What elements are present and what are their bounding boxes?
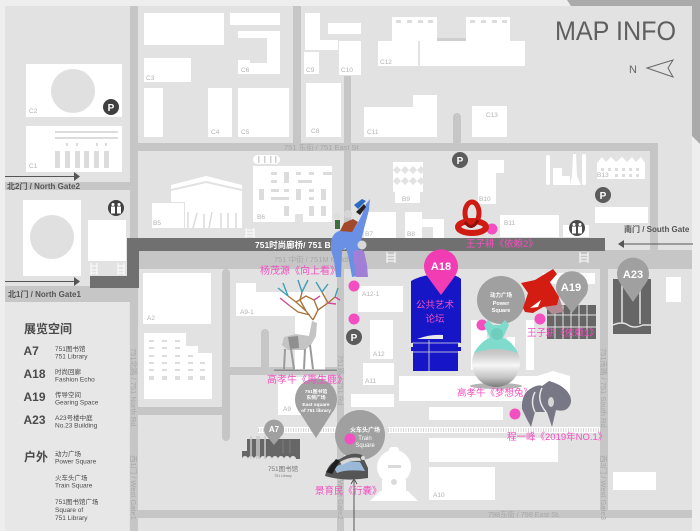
- railway: [258, 427, 600, 433]
- legend heading: outdoor: 户外: [24, 449, 48, 464]
- A19 marker: [556, 271, 588, 313]
- road and building labels: C13: [486, 112, 498, 119]
- road and building labels: A9-1: [240, 309, 254, 316]
- north compass: [629, 60, 673, 77]
- road and building labels: C1: [29, 163, 38, 170]
- building C9 and C10: [304, 13, 361, 75]
- street names: [129, 142, 609, 520]
- road and building labels: C5: [241, 129, 250, 136]
- building C11: [364, 95, 437, 137]
- legend heading: exhibition spaces: 展览空间: [24, 321, 72, 336]
- bridge label: 751时尚廊桥/ 751 Bridge: [255, 240, 352, 250]
- pink location dots: [344, 224, 546, 444]
- power plant outline: [471, 320, 534, 370]
- building with window grid: [144, 333, 212, 399]
- A7 library building: [242, 436, 300, 459]
- street names: 西1门 / West Gate1: [129, 455, 138, 520]
- A23 marker: A23: [623, 269, 643, 281]
- East square marker: 东侧广场: [306, 394, 326, 401]
- legend codes: A19: [24, 390, 46, 404]
- road and building labels: C8: [311, 128, 320, 135]
- footbridge 751 fashion bridge: [90, 238, 605, 288]
- legend rows: 时尚回廊: [55, 367, 82, 376]
- building B8: [405, 212, 444, 238]
- Train square marker: 火车头广场: [350, 426, 380, 434]
- gate: North Gate 1: 北1门 / North Gate1: [8, 289, 81, 299]
- road and building labels: B6: [257, 214, 265, 221]
- A19 gearing space building: [547, 305, 596, 339]
- street names: 751北路 / 751 North Rd: [129, 348, 139, 426]
- label: luggage: 景育民《行囊》: [315, 485, 382, 497]
- ladders: [91, 228, 588, 275]
- gate: South Gate: 南门 / South Gate: [624, 224, 690, 234]
- building B13: [597, 157, 645, 179]
- label: dream rabbit: 高孝牛《梦想兔》: [457, 387, 533, 399]
- A7 marker: A7: [269, 425, 280, 434]
- road and building labels: B11: [504, 220, 515, 227]
- legend rows: No.23 Building: [55, 422, 98, 430]
- road and building labels: C11: [367, 129, 379, 136]
- legend rows: 751 Library: [55, 354, 88, 360]
- Train square marker: Train: [358, 436, 372, 442]
- chimneys: [546, 154, 586, 185]
- legend codes: A18: [24, 367, 46, 381]
- legend rows: 动力广场: [55, 449, 82, 458]
- north compass: N: [629, 64, 637, 76]
- road and building labels: [29, 59, 609, 499]
- roof decoration: [253, 155, 280, 164]
- street names: 798东街 / 798 East St.: [488, 509, 560, 519]
- Power square marker: Power: [493, 301, 510, 307]
- sculpture: regeneration deer: [274, 280, 340, 371]
- sculpture: dream rabbit: [470, 320, 522, 389]
- lattice B9: [393, 162, 423, 203]
- building B6: [253, 166, 332, 222]
- road and building labels: C9: [306, 67, 315, 74]
- sculpture: dependence 1 red cross: [521, 269, 564, 314]
- street names: 751南路 / 751 South Rd: [599, 348, 609, 428]
- parking icons: P: [351, 333, 358, 344]
- A23 marker: [617, 258, 649, 302]
- label: giraffe work: 杨茂源《向上看》: [260, 264, 340, 277]
- label: dependence 1: 王子耕《依赖1》: [527, 327, 599, 339]
- legend rows: Gearing Space: [55, 400, 99, 406]
- street names: West Gate2: [336, 480, 345, 519]
- white buildings, north zone: [26, 13, 525, 172]
- legend rows: A23号楼中庭: [55, 413, 93, 422]
- street names: 751 东街 / 751 East St: [284, 142, 360, 152]
- legend codes: [24, 344, 46, 427]
- circular building north gate 1: [23, 200, 81, 276]
- legend rows: 751 Library: [55, 515, 88, 522]
- road and building labels: A12-1: [362, 291, 380, 298]
- title: MAP INFO: [555, 16, 676, 46]
- road and building labels: C4: [211, 129, 220, 136]
- label: deer work: 高孝牛《再生鹿》: [267, 373, 347, 386]
- gate: South Gate: [618, 224, 693, 248]
- road and building labels: C6: [241, 67, 250, 74]
- restroom icon: [108, 200, 124, 216]
- Power square marker: Square: [492, 308, 510, 314]
- sculpture: 2019 NO.1: [522, 381, 571, 427]
- legend rows: 751图书馆: [55, 344, 86, 353]
- gate: North Gate 2: 北2门 / North Gate2: [7, 181, 80, 191]
- white buildings, south zone: [143, 273, 681, 501]
- street names: 西3门 / West Gate3: [599, 455, 608, 520]
- road and building labels: B5: [153, 220, 161, 227]
- label: 2019 NO.1: 程一峰《2019年NO.1》: [507, 431, 607, 443]
- gate: North Gate 1: [5, 277, 81, 299]
- road and building labels: C2: [29, 108, 38, 115]
- A18 forum label: [416, 299, 454, 325]
- building C6: [238, 31, 280, 74]
- legend rows: 火车头广场: [55, 473, 88, 482]
- sculpture: dependence 2 red loop: [458, 202, 486, 233]
- building A9-1: [236, 283, 325, 370]
- train icon: [370, 447, 418, 501]
- Train square marker: Square: [355, 443, 375, 449]
- A23 building: [613, 279, 651, 334]
- A19 marker: A19: [561, 282, 581, 294]
- legend rows: Train Square: [55, 482, 93, 490]
- road and building labels: A9: [283, 406, 291, 413]
- building C1: [26, 126, 122, 172]
- road and building labels: B8: [407, 231, 415, 238]
- road and building labels: C10: [341, 67, 353, 74]
- Train square marker: [335, 410, 385, 460]
- road and building labels: B13: [597, 172, 609, 179]
- legend rows: [55, 344, 99, 522]
- road and building labels: B9: [402, 196, 410, 203]
- white buildings, middle zone: [23, 154, 648, 276]
- A7 caption: 751 Library: [274, 474, 292, 478]
- A18 public art forum building: [411, 275, 461, 371]
- A18 marker: [424, 249, 458, 295]
- legend rows: Power Square: [55, 458, 97, 466]
- Power square marker: [477, 276, 525, 324]
- parking icons: P: [600, 191, 607, 202]
- road and building labels: C12: [380, 59, 392, 66]
- label: dependence 2: 王子耕《依赖2》: [466, 238, 538, 250]
- A7 caption: [268, 464, 299, 478]
- road and building labels: A12: [373, 351, 385, 358]
- street names: 751 中街 / 751M Middle: [274, 254, 353, 264]
- A7 caption: 751图书馆: [268, 464, 299, 473]
- A7 marker: [264, 420, 284, 445]
- East square marker: [295, 378, 337, 438]
- legend codes: A7: [24, 344, 39, 358]
- legend rows: Fashion Echo: [55, 376, 95, 384]
- building C2: [26, 64, 122, 117]
- sculpture: luggage: [325, 454, 368, 480]
- legend: [24, 321, 99, 522]
- restroom icon: [569, 220, 585, 236]
- gate arrow: West Gate 2: [351, 479, 357, 531]
- legend rows: Square of: [55, 507, 83, 514]
- parking icons: P: [108, 103, 115, 114]
- road and building labels: B10: [479, 196, 491, 203]
- East square marker: East square: [302, 402, 330, 408]
- street names: 751路 / 751 Rd: [336, 355, 346, 405]
- East square marker: 751图书馆: [305, 388, 327, 395]
- gate: North Gate 2: [5, 172, 80, 191]
- parking icons: [103, 99, 611, 345]
- A18 forum label: 公共艺术: [416, 299, 454, 311]
- parking icons: P: [457, 156, 464, 167]
- A18 forum label: 论坛: [425, 313, 445, 325]
- sculpture: giraffe 向上看: [331, 199, 370, 277]
- road and building labels: A11: [365, 378, 376, 385]
- building 751 hall: [171, 176, 242, 228]
- building C12: [378, 17, 525, 66]
- Power square marker: 动力广场: [490, 291, 512, 299]
- legend rows: 传导空间: [55, 390, 81, 399]
- road and building labels: A2: [147, 315, 155, 322]
- road and building labels: C3: [146, 75, 155, 82]
- A18 marker: A18: [431, 261, 451, 273]
- legend codes: A23: [24, 413, 46, 427]
- railway ticks: [258, 428, 600, 432]
- road and building labels: B7: [365, 231, 373, 238]
- East square marker: of 751 library: [301, 408, 331, 414]
- legend rows: 751图书馆广场: [55, 497, 99, 506]
- road and building labels: A10: [433, 492, 445, 499]
